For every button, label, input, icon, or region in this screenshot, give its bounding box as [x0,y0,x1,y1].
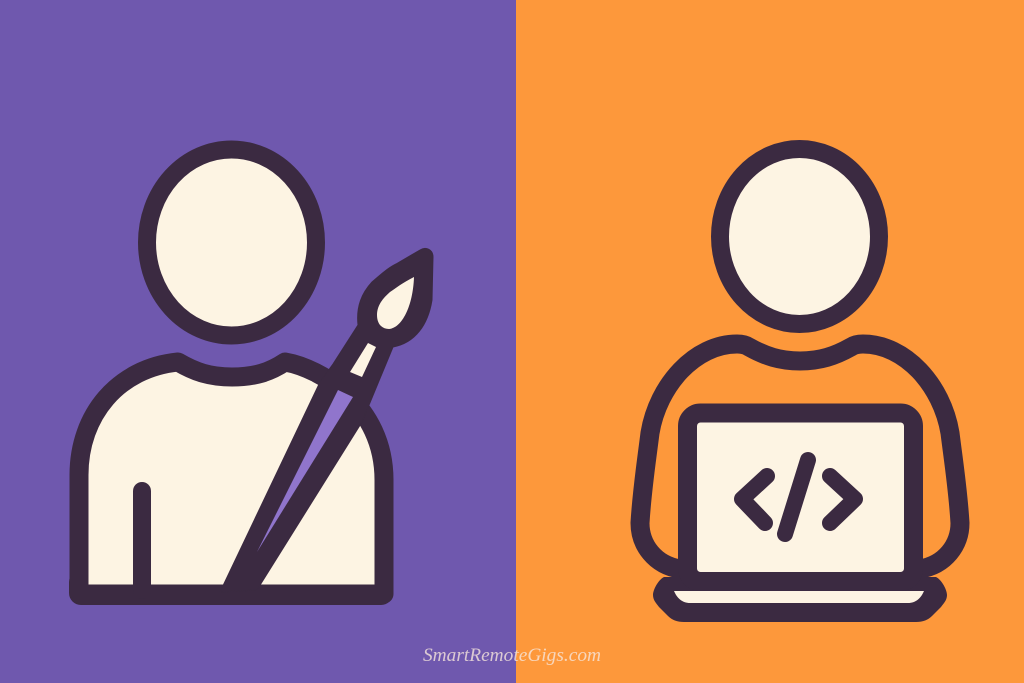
code symbol [742,460,855,534]
icon: designer body base [69,570,393,605]
panel: designer [0,0,516,683]
panel: developer [516,0,1024,683]
right angle bracket [830,476,855,523]
panel background: purple [0,0,516,683]
icon: developer body outline [640,344,960,569]
brush bristles [377,277,414,329]
icon: laptop [653,413,947,622]
laptop screen [688,413,914,582]
icon: designer arm line [133,491,151,590]
icon: designer body [79,362,384,594]
laptop base highlight [674,591,924,603]
icon: designer head [147,150,316,336]
brush ferrule [350,343,376,377]
icon: developer head [720,149,879,324]
panel background: orange [516,0,1024,683]
watermark text: SmartRemoteGigs.com [423,645,601,666]
slash [785,460,808,534]
laptop base [653,577,947,622]
left angle bracket [742,476,767,523]
icon: paintbrush [220,248,433,592]
brush handle and head outline [220,248,433,592]
brush handle highlight [257,390,353,552]
